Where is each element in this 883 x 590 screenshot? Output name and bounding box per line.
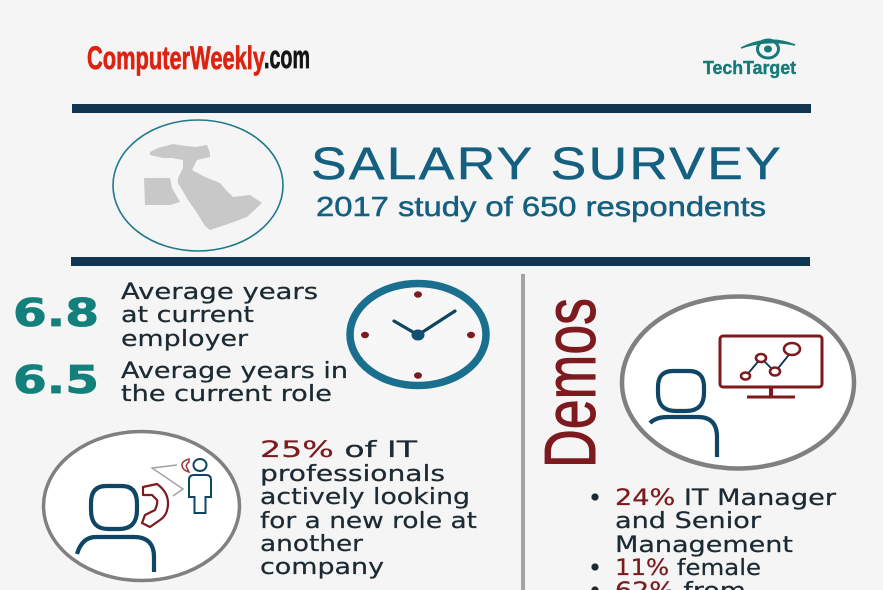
icon: clock <box>350 284 486 386</box>
bottom divider bar <box>71 257 810 266</box>
map badge <box>113 120 283 251</box>
demographics list: and Senior <box>615 508 762 534</box>
icon: small phone handset <box>182 459 189 472</box>
logo: TechTarget <box>703 40 796 78</box>
icon: small person <box>189 459 211 513</box>
stat: 6.5 years in current role: the current role <box>121 381 332 407</box>
icon: analytics badge <box>622 296 854 468</box>
stat: 6.5 years in current role <box>13 358 348 407</box>
stat: 6.8 years at current employer: at current <box>121 302 254 328</box>
vertical divider <box>521 274 525 590</box>
icon: monitor chart <box>720 336 822 397</box>
text: job seekers: another <box>260 531 364 557</box>
stat: 6.8 years at current employer: employer <box>121 326 249 352</box>
demographics list <box>592 485 837 590</box>
stat: 6.8 years at current employer: Average years <box>121 279 318 305</box>
text: job seekers: professionals <box>260 461 445 487</box>
text: job seekers: for a new role at <box>260 508 477 534</box>
icon: large person <box>77 486 154 572</box>
demographics list: Management <box>615 532 793 558</box>
subtitle: 2017 study of 650 respondents <box>316 191 766 222</box>
stat: 6.8 years at current employer <box>13 279 318 352</box>
logo: ComputerWeekly.com: .com <box>264 39 310 75</box>
stat: 6.5 years in current role: Average years in <box>121 358 348 384</box>
demographics list: 24% IT Manager <box>615 485 837 511</box>
speech connector <box>152 465 183 496</box>
stat: 6.8 years at current employer: 6.8 <box>13 291 99 335</box>
logo: ComputerWeekly.com: ComputerWeekly <box>87 40 265 76</box>
text: job seekers: 25% of IT <box>260 437 417 463</box>
icon: phone call badge <box>44 432 240 580</box>
top divider bar <box>72 104 811 113</box>
stat: 6.5 years in current role: 6.5 <box>13 358 99 402</box>
logo: TechTarget: TechTarget <box>703 58 796 78</box>
text: job seekers: actively looking <box>260 484 470 510</box>
text: job seekers: company <box>260 554 384 580</box>
heading: Demos: Demos <box>531 298 611 468</box>
title: SALARY SURVEY <box>311 138 783 189</box>
demographics list: 11% female <box>615 555 761 581</box>
icon: large phone handset <box>142 484 168 527</box>
icon: person <box>650 371 717 457</box>
text: job seekers <box>260 437 477 580</box>
